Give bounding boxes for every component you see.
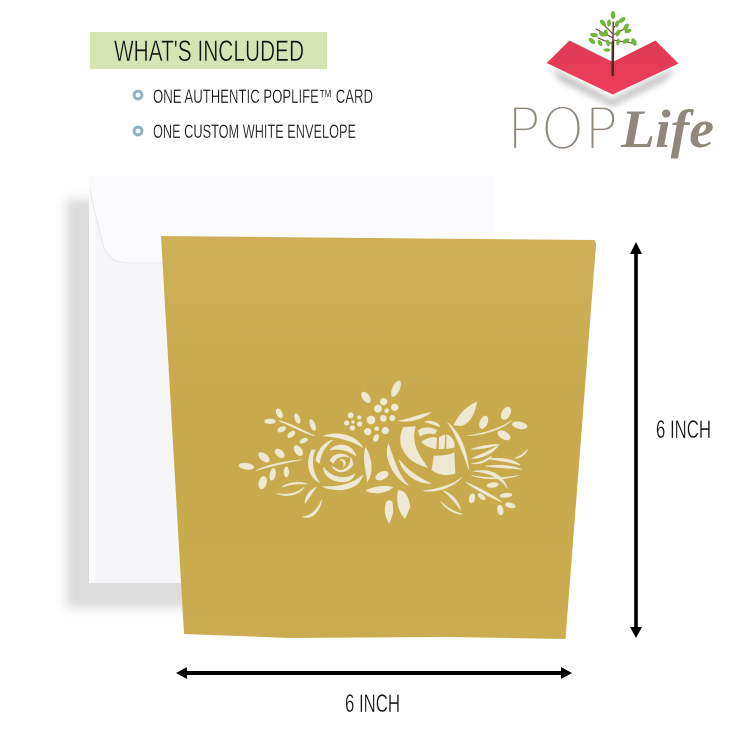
right rose <box>387 413 469 491</box>
logo tree <box>588 11 638 75</box>
horizontal dimension label: 6 INCH <box>345 690 400 718</box>
vertical dimension arrow <box>630 242 642 638</box>
left rose <box>308 434 371 490</box>
right sprigs <box>441 402 528 515</box>
item: card <box>134 87 373 108</box>
list of included items <box>134 87 373 143</box>
horizontal dimension arrow <box>176 667 572 679</box>
item: card: ONE AUTHENTIC POPLIFE™ CARD <box>153 87 373 108</box>
left sprigs <box>239 408 322 517</box>
gold pop-up card <box>161 236 596 639</box>
heading: what's included: WHAT'S INCLUDED <box>114 35 304 68</box>
card panel <box>161 236 596 639</box>
item: envelope <box>134 122 356 143</box>
small flowers <box>344 380 410 523</box>
logo red open book <box>547 40 678 94</box>
logo book shadow <box>552 68 675 106</box>
floral cut-out <box>239 380 528 523</box>
white envelope <box>89 176 494 583</box>
logo word pop: POP <box>507 97 618 162</box>
envelope body <box>89 176 494 583</box>
logo: poplife <box>507 11 714 162</box>
heading: what's included <box>90 32 327 69</box>
vertical dimension label: 6 INCH <box>656 416 711 444</box>
item: envelope: ONE CUSTOM WHITE ENVELOPE <box>153 122 356 143</box>
envelope shadow <box>66 199 406 608</box>
envelope flap <box>89 176 494 263</box>
logo word life: Life <box>620 99 714 159</box>
